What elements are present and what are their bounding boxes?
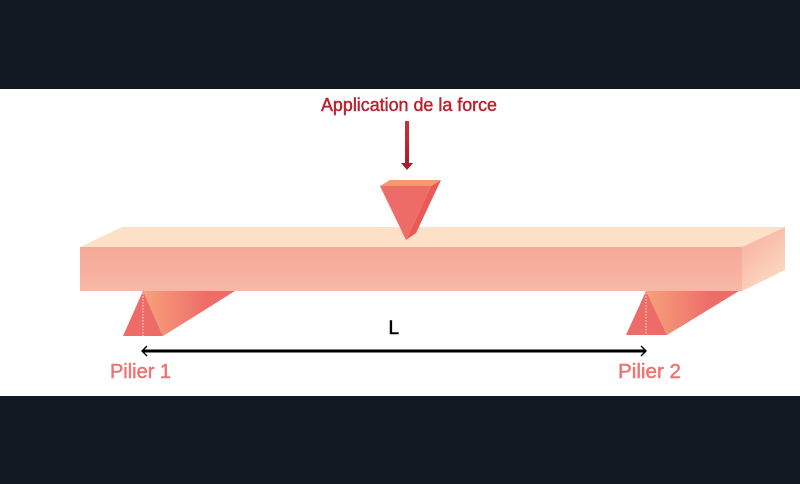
label: pilier 1: Pilier 1 xyxy=(110,361,171,383)
heading: application de la force: Application de la force xyxy=(321,95,497,115)
dimension arrow: span between supports xyxy=(142,346,646,356)
arrow: force direction xyxy=(401,121,413,170)
label: pilier 2: Pilier 2 xyxy=(618,361,681,383)
indenter xyxy=(380,180,441,240)
label: length L: L xyxy=(388,318,399,339)
support: pilier 1 xyxy=(123,291,235,336)
beam xyxy=(80,227,785,291)
white panel xyxy=(0,89,800,396)
support: pilier 2 xyxy=(626,291,739,335)
